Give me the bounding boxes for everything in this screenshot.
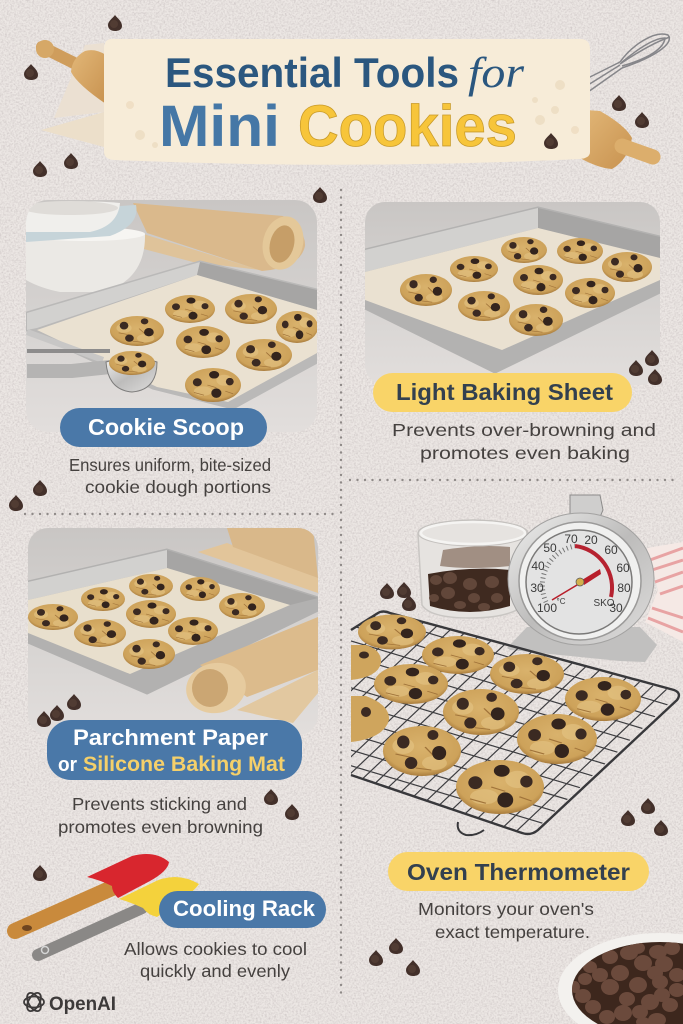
description: Allows cookies to cool — [124, 939, 307, 959]
icon: whisk — [588, 34, 670, 92]
panel: cooling rack — [15, 854, 326, 981]
description: cookie dough portions — [85, 477, 271, 497]
label pill: Oven Thermometer — [388, 852, 649, 891]
description — [124, 939, 307, 981]
icon: bowl of chocolate chips — [558, 933, 683, 1024]
title line 2: Mini — [159, 94, 280, 159]
description — [69, 455, 271, 497]
description — [58, 794, 263, 837]
title line 2: Cookies — [298, 94, 517, 159]
title line 1: Essential Tools — [165, 49, 459, 96]
label pill: Oven Thermometer: Oven Thermometer — [407, 859, 630, 885]
icon: cookie scoop — [27, 332, 157, 392]
icon: right rolling pin — [580, 110, 653, 169]
cookies on rack — [351, 614, 641, 814]
title line 2 — [159, 94, 517, 159]
panel: oven thermometer — [350, 494, 683, 942]
label pill: Parchment Paper or Silicone Baking Mat: Silicone Baking Mat — [83, 752, 285, 776]
label pill: Light Baking Sheet: Light Baking Sheet — [396, 379, 613, 405]
dotted divider: vertical — [340, 190, 342, 995]
description: quickly and evenly — [140, 961, 290, 981]
logo: OpenAI: OpenAI — [49, 994, 116, 1015]
dial numbers: 100 — [537, 601, 557, 615]
dial numbers: 20 — [584, 533, 598, 547]
label pill: Cookie Scoop: Cookie Scoop — [88, 414, 244, 440]
needle — [552, 569, 601, 600]
dial numbers: 30 — [530, 581, 544, 595]
icon: towel — [645, 542, 683, 642]
description: Prevents over-browning and — [392, 420, 656, 440]
logo: OpenAI — [24, 991, 116, 1015]
description: promotes even baking — [420, 443, 630, 463]
description — [392, 420, 656, 463]
icon: cooling rack — [350, 610, 680, 836]
panel: cookie scoop — [22, 200, 318, 497]
dial numbers: 80 — [617, 581, 631, 595]
label pill: Cooling Rack: Cooling Rack — [173, 896, 315, 921]
dial numbers: 70 — [564, 532, 578, 546]
label pill: Parchment Paper or Silicone Baking Mat — [47, 720, 302, 780]
photo: tray with parchment roll — [28, 528, 318, 735]
dial numbers: 60 — [604, 543, 618, 557]
dial numbers: SKO — [593, 598, 615, 609]
panel: parchment paper or silicone mat — [28, 528, 318, 837]
label pill: Cooling Rack — [159, 891, 326, 928]
label pill: Parchment Paper or Silicone Baking Mat: or — [58, 754, 77, 776]
title line 1: for — [468, 50, 524, 97]
label pill: Parchment Paper or Silicone Baking Mat: Parchment Paper — [73, 725, 268, 750]
label pill: Cookie Scoop — [60, 408, 267, 447]
description — [418, 899, 594, 942]
description: exact temperature. — [435, 922, 590, 942]
dial numbers: 40 — [531, 559, 545, 573]
title banner — [104, 39, 590, 165]
dial numbers: °C — [557, 597, 566, 606]
dial numbers: 50 — [543, 541, 557, 555]
photo: baking tray with bowls, parchment and scoop — [22, 200, 318, 432]
icon: glass jar of chocolate chips — [418, 520, 528, 618]
dial numbers: 60 — [616, 561, 630, 575]
icon: left rolling pin and parchment — [36, 40, 106, 147]
icon: oven thermometer — [507, 495, 657, 662]
dial numbers: 30 — [609, 601, 623, 615]
label pill: Light Baking Sheet — [373, 373, 632, 412]
description: Ensures uniform, bite-sized — [69, 455, 271, 475]
description: promotes even browning — [58, 817, 263, 837]
description: Monitors your oven's — [418, 899, 594, 919]
icon: spatulas — [15, 854, 199, 955]
dial numbers — [530, 532, 631, 615]
photo: baking tray with cookies — [365, 202, 660, 385]
panel: light baking sheet — [365, 202, 660, 463]
description: Prevents sticking and — [72, 794, 247, 814]
